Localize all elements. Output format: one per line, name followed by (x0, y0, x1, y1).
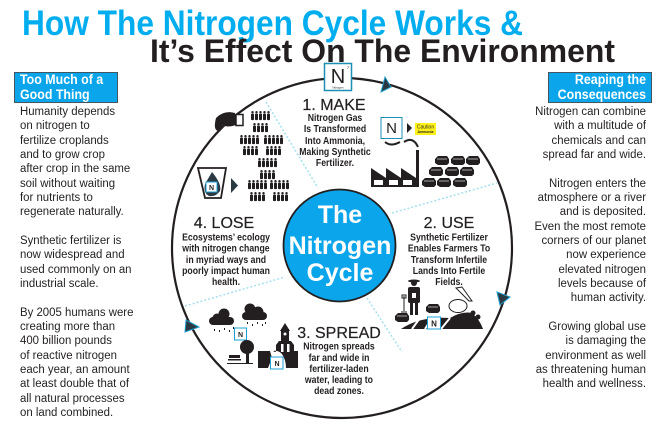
text block: left column: on nitrogen to (20, 118, 90, 132)
title: It’s Effect On The Environment (150, 33, 615, 69)
nitrogen tile: rain (234, 328, 246, 340)
text block: left column: Humanity depends (20, 104, 115, 118)
description: dead zones. (314, 385, 364, 396)
heading: reaping the consequences (548, 72, 652, 102)
panel: reaping the consequences (534, 72, 652, 390)
text block: left column: regenerate naturally. (20, 204, 124, 218)
description: Making Synthetic (299, 146, 371, 157)
nitrogen element tile (324, 64, 352, 90)
description: Nitrogen spreads (303, 341, 375, 352)
text block: left column: of reactive nitrogen (20, 348, 117, 362)
description (299, 112, 371, 168)
center circle: the nitrogen cycle (284, 190, 396, 302)
description (181, 232, 271, 287)
text block: right column: corners of our planet (541, 233, 647, 247)
heading: too much of a good thing: Good Thing (20, 87, 90, 102)
icon: people (240, 111, 289, 201)
text block: left column: creating more than (20, 319, 115, 333)
icon: nitrogen tile, caution: Ammonia (418, 130, 434, 134)
icon: water glass with nitrogen: N (209, 185, 214, 192)
description: Fertilizer. (316, 157, 354, 168)
description: fertilizer-laden (309, 363, 369, 374)
description: with nitrogen change (181, 243, 270, 254)
description: Is Transformed (304, 123, 366, 134)
step 2: use (395, 215, 490, 329)
heading: reaping the consequences: Consequences (558, 87, 646, 102)
icon: factory (371, 140, 419, 187)
heading: 4. LOSE (194, 215, 254, 232)
arrow: right (497, 292, 510, 305)
step 3: spread (209, 304, 381, 396)
text block: left column: soil without waiting (20, 176, 115, 190)
heading: 2. USE (424, 215, 474, 232)
cycle ring (172, 78, 512, 418)
nitrogen element tile: Nitrogen (332, 86, 344, 90)
icon: rain clouds (209, 304, 267, 331)
description: health. (212, 276, 240, 287)
description: Ecosystems’ ecology (182, 232, 271, 243)
icon: thumbs down on ring (215, 112, 243, 131)
text block: right column: as threatening human (536, 362, 646, 376)
text block: left column: on land combined. (20, 405, 113, 419)
icon: nitrogen tile, caution: Caution (417, 124, 434, 130)
text block: right column: now experience (566, 247, 646, 261)
text block: right column: Nitrogen enters the (549, 176, 646, 190)
nitrogen tile: river: N (274, 361, 280, 368)
text block: left column: at least double that of (20, 376, 130, 390)
text block: right column: and is deposited. (560, 204, 646, 218)
heading: too much of a good thing: Too Much of a (20, 72, 104, 87)
dotted dividers (185, 102, 497, 352)
heading: 1. MAKE (302, 97, 366, 114)
description: Lands Into Fertile (413, 265, 485, 276)
description: water, leading to (304, 374, 373, 385)
text block: right column: atmosphere or a river (538, 190, 646, 204)
icon: bell tower and river (258, 323, 298, 368)
text block: left column: for nutrients to (20, 190, 93, 204)
text block: left column: industrial scale. (20, 276, 99, 290)
step 4: lose (181, 111, 289, 287)
icon: nitrogen tile, caution: N (386, 120, 397, 137)
center circle: the nitrogen cycle: Cycle (307, 259, 373, 287)
nitrogen tile: river (270, 357, 283, 369)
text block: left column: Synthetic fertilizer is (20, 233, 121, 247)
description: Fields. (435, 276, 463, 287)
nitrogen element tile: 7 (347, 65, 350, 70)
icon: tree and bench (227, 340, 254, 364)
description: Into Ammonia, (305, 135, 365, 146)
text block: left column: each year, an amount (20, 362, 130, 376)
description: Nitrogen Gas (308, 112, 362, 123)
text block: left column: fertilize croplands (20, 133, 109, 147)
step 1: make (299, 64, 480, 187)
text block: left column: after crop in the same (20, 161, 131, 175)
icon: farmer, field, vegetables: N (431, 320, 437, 328)
description: in myriad ways and (186, 254, 266, 265)
heading: 3. SPREAD (297, 325, 381, 342)
title: How The Nitrogen Cycle Works & (22, 4, 523, 43)
text block: left column: and to grow crop (20, 147, 105, 161)
text block: right column (534, 104, 647, 390)
text block: left column: used commonly on an (20, 262, 132, 276)
center circle: the nitrogen cycle: The (318, 201, 362, 229)
description: far and wide in (309, 352, 370, 363)
arrow: top (381, 77, 391, 92)
text block: right column: chemicals and can (552, 133, 646, 147)
icon: fertilizer bags (422, 156, 480, 187)
icon: nitrogen tile, caution (381, 118, 436, 138)
text block: right column: Even the most remote (534, 219, 646, 233)
nitrogen tile: rain: N (238, 332, 243, 339)
text block: right column: environment as well (545, 348, 646, 362)
description (408, 232, 490, 287)
text block: left column: By 2005 humans were (20, 305, 134, 319)
panel: too much of a good thing (14, 72, 134, 419)
icon: water glass with nitrogen (198, 168, 238, 198)
description: Synthetic Fertilizer (410, 232, 488, 243)
text block: right column: spread far and wide. (543, 147, 646, 161)
description: Transform Infertile (411, 254, 487, 265)
description: poorly impact human (182, 265, 270, 276)
text block: left column: all natural processes (20, 391, 125, 405)
text block: left column: 400 billion pounds (20, 333, 112, 347)
description (303, 341, 375, 396)
text block: right column: with a multitude of (553, 118, 647, 132)
text block: right column: levels because of (558, 276, 647, 290)
text block: right column: Growing global use (548, 319, 646, 333)
title (22, 4, 615, 69)
text block: right column: is damaging the (566, 333, 646, 347)
text block: right column: health and wellness. (543, 376, 646, 390)
text block: left column: now widespread and (20, 247, 125, 261)
description: Enables Farmers To (408, 243, 490, 254)
heading: too much of a good thing (14, 72, 118, 102)
text block: left column (20, 104, 134, 419)
text block: right column: elevated nitrogen (559, 262, 646, 276)
heading: reaping the consequences: Reaping the (575, 72, 646, 87)
text block: right column: Nitrogen can combine (535, 104, 646, 118)
center circle: the nitrogen cycle: Nitrogen (289, 232, 391, 260)
arrow: bottom left (185, 320, 199, 332)
nitrogen element tile: N (331, 66, 345, 88)
text block: right column: human activity. (571, 290, 646, 304)
